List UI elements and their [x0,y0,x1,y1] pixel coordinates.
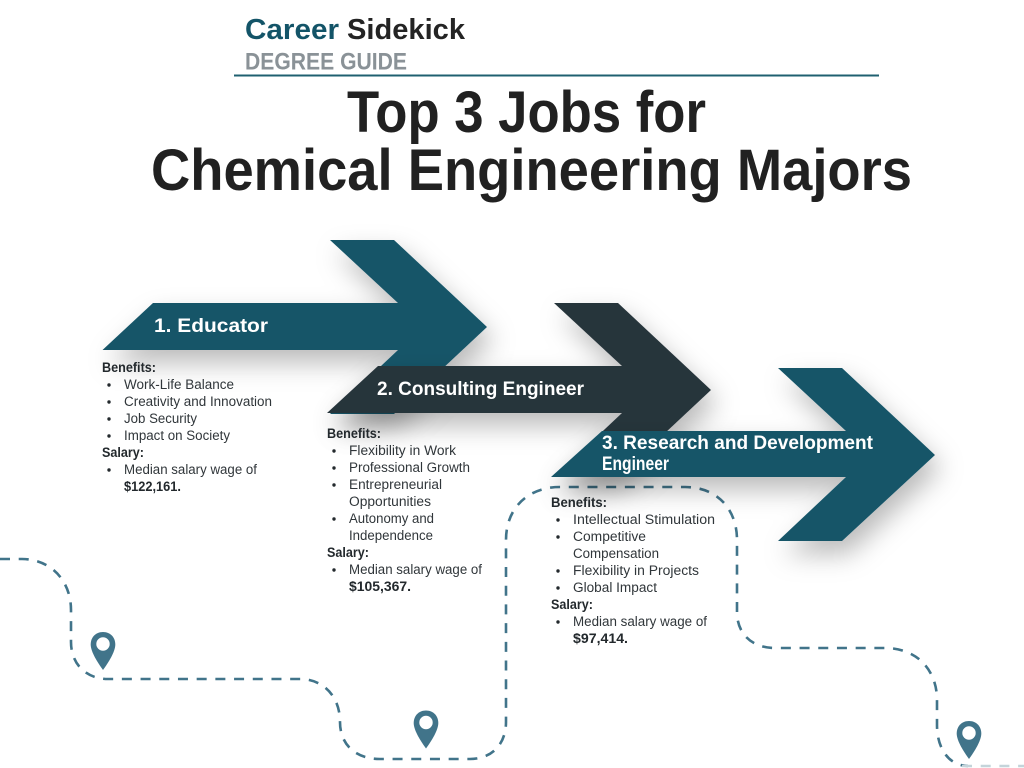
panel: Consulting Engineer details: Opportunities [349,494,431,509]
panel: Educator details [102,360,272,494]
arrow 1: Educator [102,240,487,414]
panel: Educator details: Median salary wage of [124,462,257,477]
arrow 3: Research and Development Engineer: 3. Research and Development [602,432,873,454]
dashed career path [0,487,1024,766]
panel: Educator details: Creativity and Innovation [124,394,272,409]
panel: Research and Development details: Salary: [551,597,593,612]
arrow 2: Consulting Engineer: 2. Consulting Engineer [377,378,584,400]
panel: Research and Development details: Competitive [573,529,646,544]
icon: map pin 1 [91,632,115,670]
panel: Educator details: Benefits: [102,360,156,375]
icon: map pin 3 [957,721,981,759]
panel: Consulting Engineer details: Median salary wage of [349,562,482,577]
panel: Consulting Engineer details: Salary: [327,545,369,560]
title: Chemical Engineering Majors [151,138,912,203]
panel: Consulting Engineer details: Benefits: [327,426,381,441]
panel: Research and Development details: Compensation [573,546,659,561]
icon: map pin 2 [414,710,438,748]
panel: Consulting Engineer details: Entrepreneurial [349,477,442,492]
panel: Consulting Engineer details: Professional Growth [349,460,470,475]
panel: Research and Development details [551,495,715,646]
panel: Research and Development details: Benefits: [551,495,607,510]
panel: Educator details: Impact on Society [124,428,230,443]
arrow 3: Research and Development Engineer [551,368,935,541]
logo: Career Sidekick: Sidekick [347,14,466,46]
panel: Research and Development details: Global Impact [573,580,657,595]
panel: Research and Development details: Intellectual Stimulation [573,512,715,527]
arrow 1: Educator: 1. Educator [154,315,268,337]
logo: Career Sidekick [245,14,466,46]
panel: Educator details: Salary: [102,445,144,460]
subheading: degree guide: DEGREE GUIDE [245,48,407,76]
panel: Consulting Engineer details: $105,367. [349,579,411,594]
title [151,80,912,203]
panel: Educator details: Work-Life Balance [124,377,234,392]
arrow 2: Consulting Engineer [327,303,711,477]
logo: Career Sidekick: Career [245,14,339,46]
title: Top 3 Jobs for [347,80,706,145]
panel: Consulting Engineer details [327,426,482,594]
panel: Research and Development details: $97,414. [573,631,628,646]
panel: Research and Development details: Median salary wage of [573,614,707,629]
panel: Consulting Engineer details: Autonomy and [349,511,434,526]
panel: Educator details: Job Security [124,411,197,426]
panel: Educator details: $122,161. [124,479,181,494]
panel: Consulting Engineer details: Independence [349,528,433,543]
panel: Research and Development details: Flexibility in Projects [573,563,699,578]
panel: Consulting Engineer details: Flexibility in Work [349,443,456,458]
arrow 3: Research and Development Engineer: Engineer [602,453,669,475]
